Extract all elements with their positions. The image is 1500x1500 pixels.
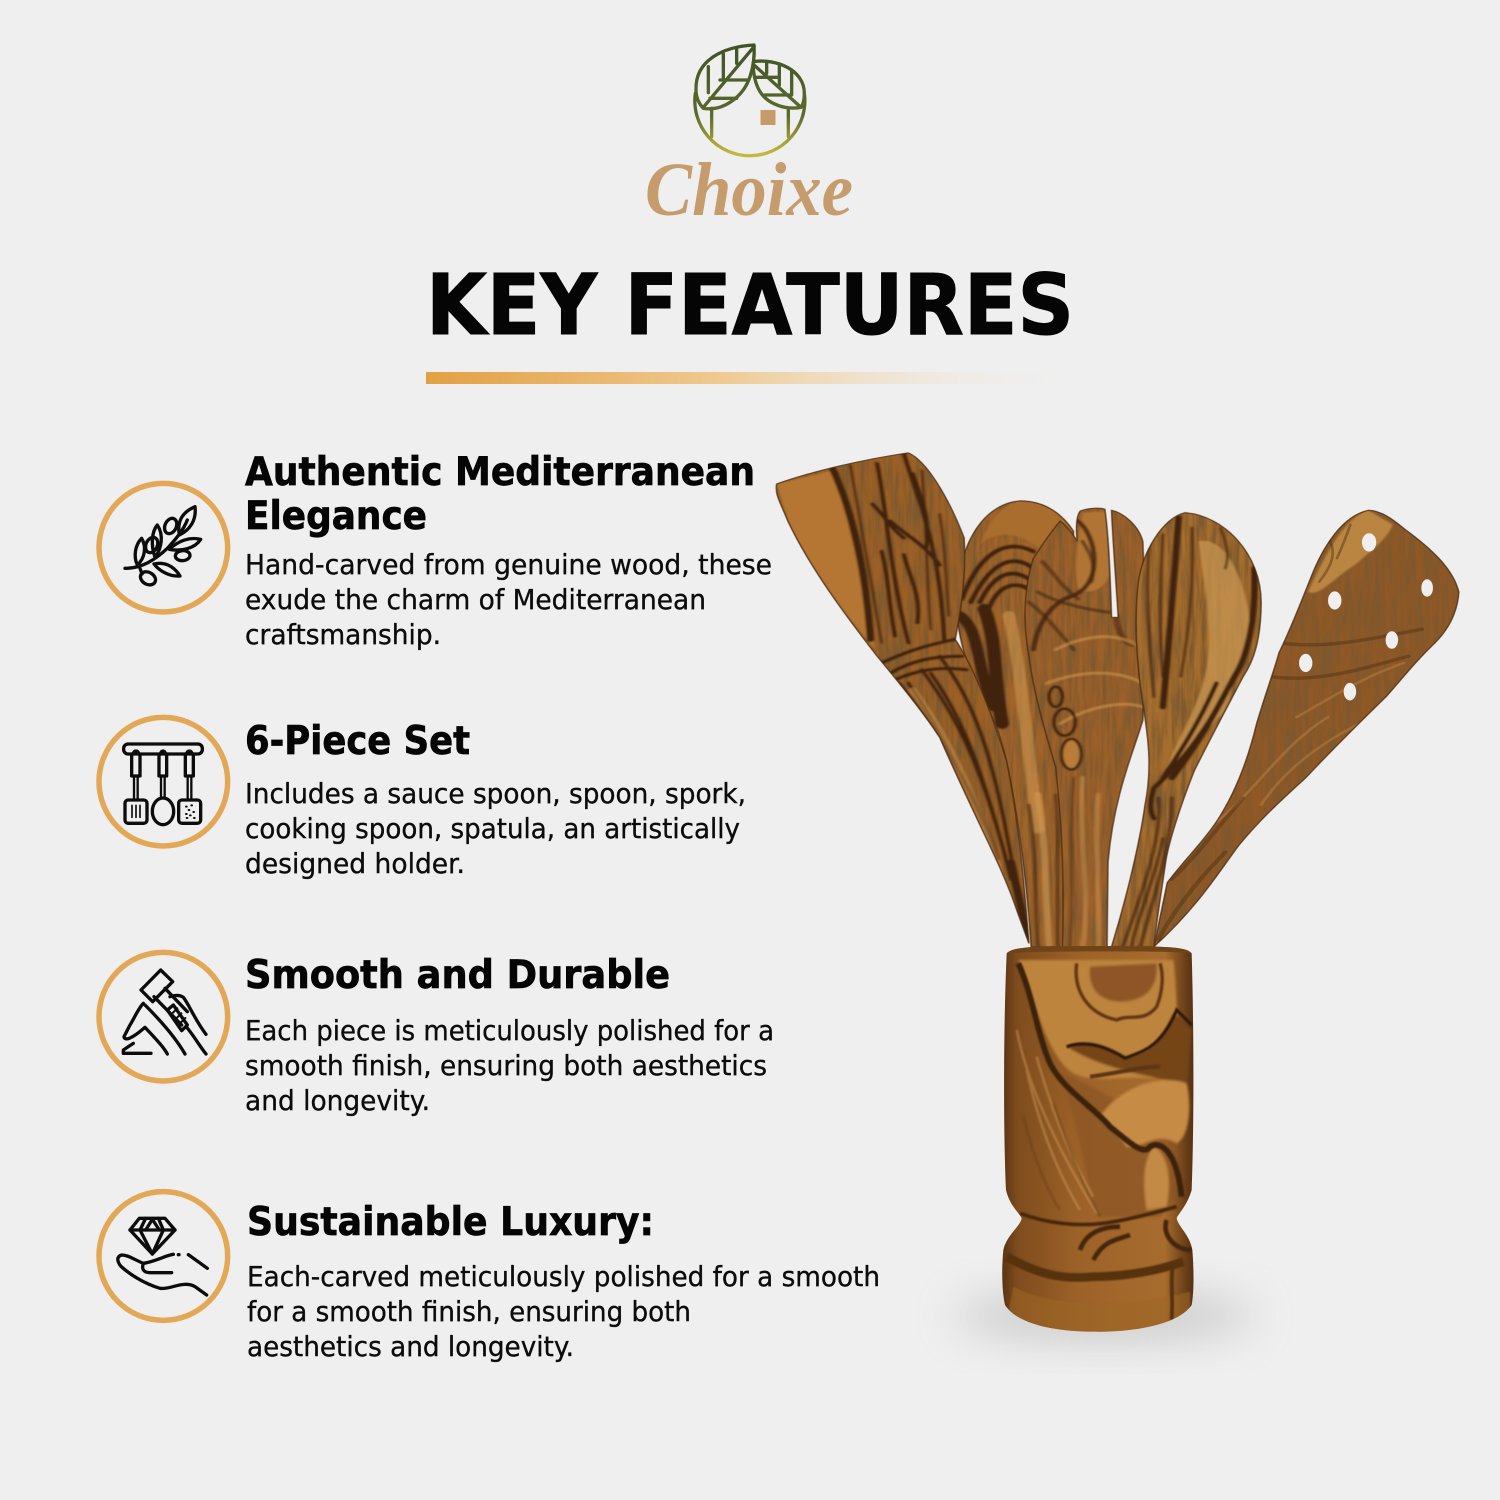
wooden spoon: [1112, 513, 1261, 947]
feature 4: Sustainable Luxury: aesthetics and longevity.: [247, 1330, 574, 1363]
feature 1: Authentic Mediterranean Elegance: craftsmanship.: [245, 618, 441, 651]
description: Hand-carved from genuine wood, these: [245, 548, 772, 581]
logo window square: [760, 110, 776, 125]
feature 1: Authentic Mediterranean Elegance: exude the charm of Mediterranean: [245, 583, 706, 616]
icon: diamond over hand: [99, 1192, 228, 1320]
icon: olive branch: [99, 483, 228, 612]
product photo illustration: olive wood utensils in holder: [776, 453, 1459, 1338]
serving spoon: [957, 501, 1074, 947]
description: Each piece is meticulously polished for a: [245, 1014, 774, 1047]
holder shadow: [955, 1294, 1255, 1338]
icon: hand with carving tool: [99, 952, 228, 1081]
feature 1: Authentic Mediterranean Elegance: Elegance: [245, 494, 427, 539]
feature 2: 6-Piece Set: [99, 717, 746, 880]
feature 1: Authentic Mediterranean Elegance: [99, 450, 772, 651]
heading: Authentic Mediterranean: [245, 450, 755, 495]
title underline: [426, 372, 1076, 384]
feature 2: 6-Piece Set: designed holder.: [245, 847, 465, 880]
feature 4: Sustainable Luxury: [99, 1192, 880, 1363]
large spatula: [776, 453, 1029, 943]
heading: Smooth and Durable: [245, 953, 670, 998]
feature 2: 6-Piece Set: cooking spoon, spatula, an artistically: [245, 812, 740, 845]
logo mark: leaves and house: [695, 45, 805, 156]
feature 4: Sustainable Luxury: for a smooth finish, ensuring both: [247, 1295, 691, 1328]
feature 3: Smooth and Durable: smooth finish, ensuring both aesthetics: [245, 1049, 767, 1082]
description: Each-carved meticulously polished for a smooth: [247, 1260, 880, 1293]
holder: [1002, 946, 1194, 1337]
title: KEY FEATURES: [426, 256, 1074, 354]
logo: [645, 45, 853, 232]
description: Includes a sauce spoon, spoon, spork,: [245, 777, 746, 810]
feature 3: Smooth and Durable: and longevity.: [245, 1084, 430, 1117]
feature 3: Smooth and Durable: [99, 952, 774, 1117]
fork: [1025, 508, 1145, 947]
logo wordmark: Choixe: [645, 148, 853, 232]
icon: hanging utensils: [99, 717, 228, 846]
slotted spatula: [1154, 510, 1459, 947]
heading: 6-Piece Set: [245, 719, 470, 764]
utensils: [776, 453, 1459, 947]
heading: Sustainable Luxury:: [247, 1200, 654, 1245]
